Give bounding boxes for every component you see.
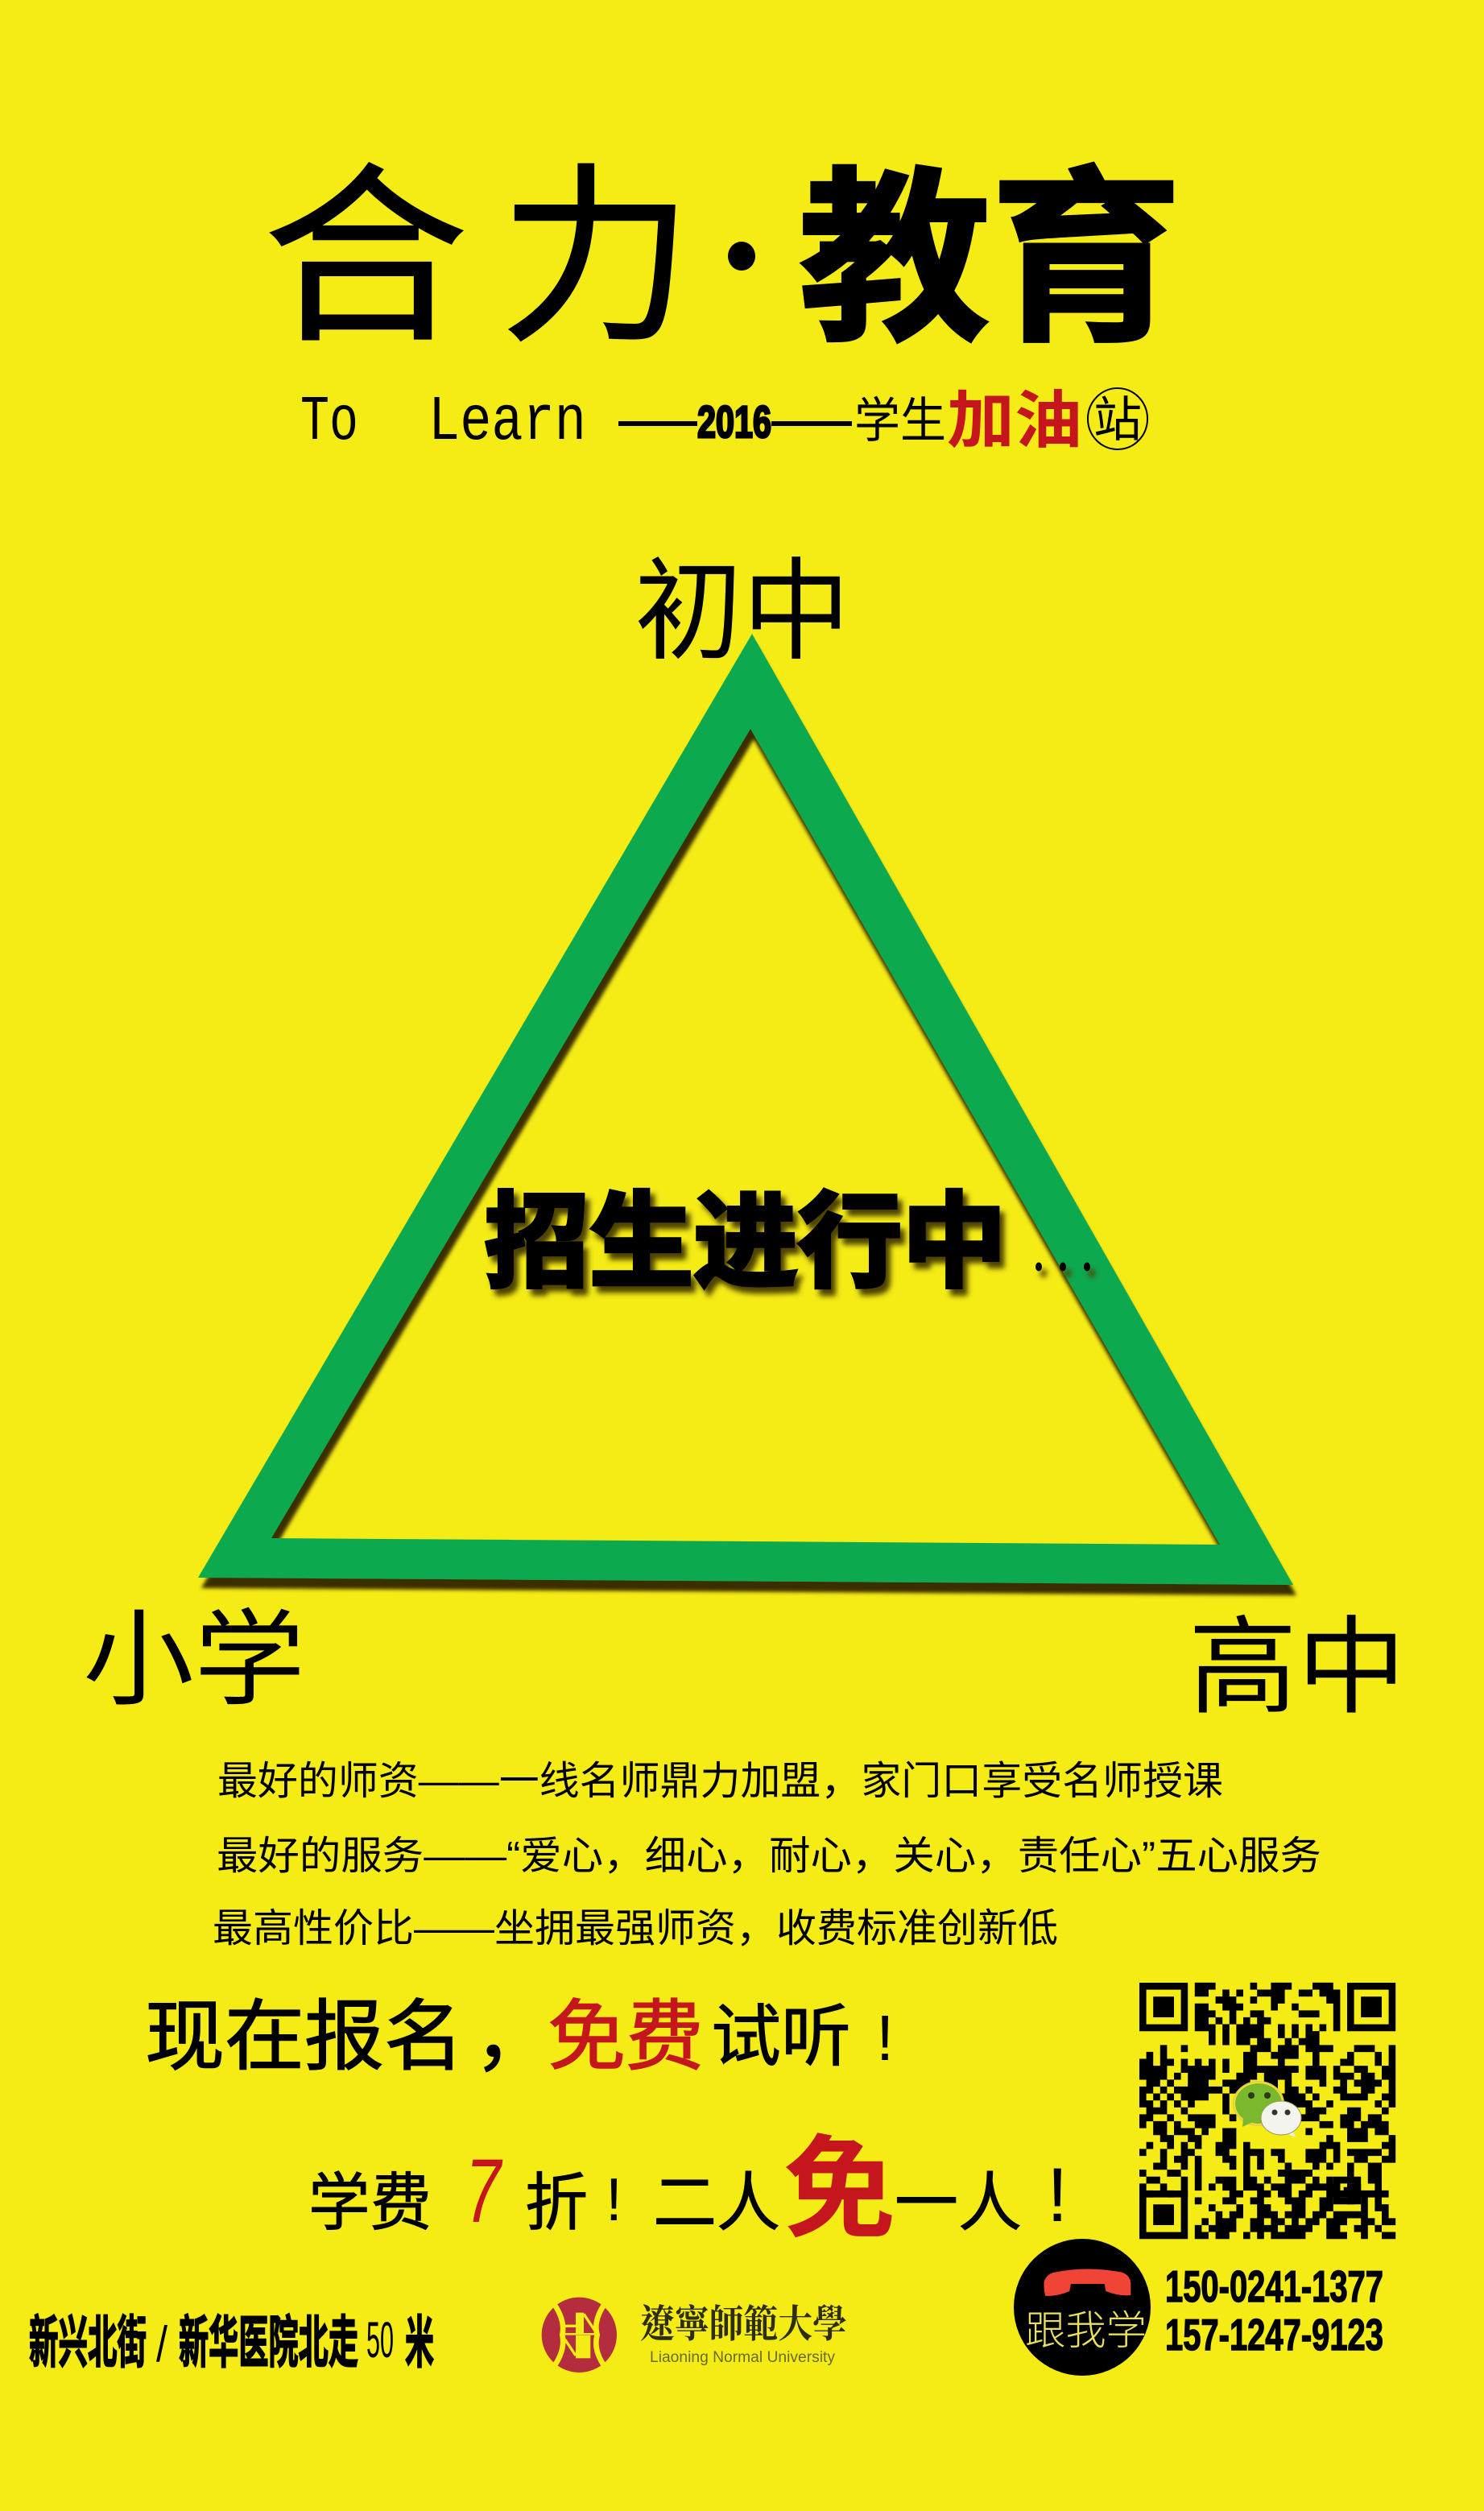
subtitle: 加油 <box>947 370 1082 461</box>
address: 新华医院北走 <box>179 2298 358 2379</box>
title: 教育 <box>799 108 1182 379</box>
headline: enrolment in progress: 招生进行中 <box>485 1158 1007 1309</box>
QR code <box>1139 1983 1395 2239</box>
offer: discount: 折 <box>525 2153 588 2243</box>
label: primary: 小学 <box>83 1575 305 1727</box>
offer: free trial: ， <box>474 1994 552 2080</box>
offer: discount: 免 <box>783 2099 895 2261</box>
subtitle <box>300 370 1147 461</box>
address: 新兴北街 <box>29 2298 147 2379</box>
offer: free trial <box>145 1994 894 2080</box>
offer: discount <box>308 2099 1068 2261</box>
title <box>262 102 1182 380</box>
subtitle: To <box>300 386 358 458</box>
icon: phone badge <box>1014 2239 1151 2376</box>
university logo <box>542 2298 617 2372</box>
offer: free trial: ! <box>876 2002 894 2074</box>
offer: discount: 7 <box>465 2141 503 2241</box>
address <box>29 2298 434 2379</box>
green triangle <box>198 634 1293 1585</box>
address: / <box>156 2317 168 2372</box>
offer: free trial: 免费 <box>548 1994 704 2080</box>
phone numbers <box>1165 2261 1383 2360</box>
subtitle: 2016 <box>697 396 771 447</box>
phone numbers: 157-1247-9123 <box>1165 2310 1383 2360</box>
offer: discount: ! <box>1047 2153 1068 2238</box>
title: 力 <box>499 102 692 380</box>
label: senior high: 高中 <box>1188 1582 1406 1735</box>
address: 米 <box>405 2298 434 2379</box>
university name <box>640 2293 847 2366</box>
offer: discount: 一人 <box>895 2151 1022 2244</box>
offer: discount: 学费 <box>308 2153 432 2243</box>
university name: 遼寧師範大學 <box>640 2293 847 2348</box>
feature line 1: 最好的师资——一线名师鼎力加盟，家门口享受名师授课 <box>217 1760 1223 1803</box>
title: 合 <box>262 102 469 380</box>
feature line 3: 最高性价比——坐拥最强师资，收费标准创新低 <box>213 1907 1058 1950</box>
icon: WeChat <box>1234 2082 1301 2137</box>
icon: phone badge: 跟我学 <box>1025 2298 1147 2356</box>
offer: discount: 二人 <box>653 2151 780 2244</box>
offer: free trial: 现在报名 <box>145 1994 464 2080</box>
feature line 2: 最好的服务——“爱心，细心，耐心，关心，责任心”五心服务 <box>217 1835 1321 1878</box>
subtitle: 学生 <box>854 382 946 452</box>
phone numbers: 150-0241-1377 <box>1165 2261 1383 2311</box>
university name: Liaoning Normal University <box>650 2349 835 2366</box>
label: junior high: 初中 <box>635 521 850 682</box>
subtitle: 站 <box>1093 381 1142 451</box>
subtitle: Learn <box>428 386 586 458</box>
address: 50 <box>366 2312 394 2368</box>
offer: discount: ! <box>606 2166 622 2233</box>
offer: free trial: 试听 <box>711 1999 851 2075</box>
